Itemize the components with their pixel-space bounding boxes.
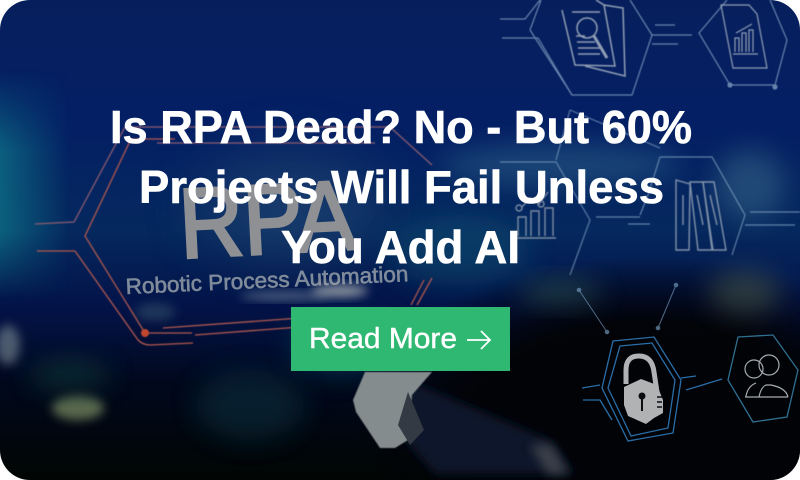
read more button: Read More bbox=[309, 323, 457, 355]
robot hand bbox=[240, 285, 575, 474]
title: Projects Will Fail Unless bbox=[139, 161, 664, 213]
icon: people hexagon bbox=[728, 335, 798, 422]
icon: padlock hexagon bbox=[582, 337, 722, 441]
RPA logo text: RPA bbox=[176, 159, 358, 279]
title bbox=[112, 109, 692, 264]
red circuit hexagon bbox=[35, 127, 432, 345]
title: Is RPA Dead? No - But 60% bbox=[110, 101, 692, 153]
title: You Add AI bbox=[281, 221, 520, 273]
RPA logo text: Robotic Process Automation bbox=[125, 261, 409, 299]
RPA logo text bbox=[126, 180, 408, 294]
icon: search document hexagon bbox=[500, 0, 692, 95]
icon: arrow bbox=[467, 331, 490, 349]
read more button bbox=[291, 307, 510, 371]
icon: bar chart hexagon bbox=[500, 110, 660, 275]
icon: chart document hexagon bbox=[699, 0, 787, 89]
icon: binders hexagon bbox=[596, 157, 800, 255]
connector lines bbox=[577, 283, 678, 334]
